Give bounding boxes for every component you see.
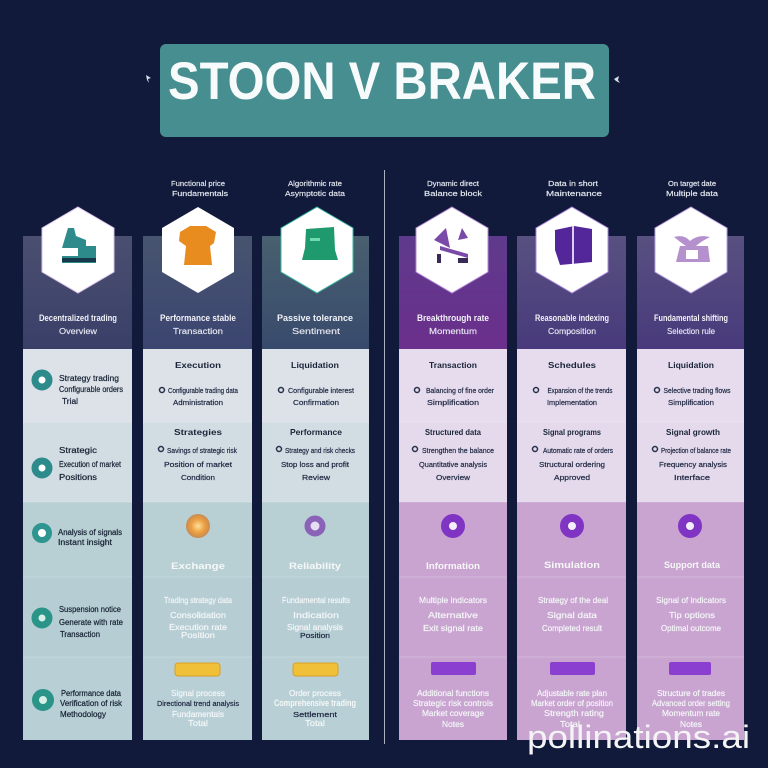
column 4 caption: Dynamic direct <box>427 179 480 188</box>
row text: Methodology <box>60 710 106 719</box>
title banner: STOON V BRAKER <box>168 52 596 111</box>
column 4 row text: Simplification <box>427 398 479 407</box>
center divider <box>384 170 386 744</box>
column 2 caption: Fundamentals <box>172 189 228 198</box>
column 5 row text: Implementation <box>547 398 597 407</box>
row text: Generate with rate <box>59 618 124 627</box>
column 6 row text: Selective trading flows <box>664 386 731 395</box>
column 2 header panel <box>143 236 252 349</box>
column 6 bullets <box>652 388 660 452</box>
column 4 row text: Overview <box>436 473 471 482</box>
row text: Strategic <box>59 446 97 455</box>
row icons <box>35 373 50 708</box>
column 2 row text: Condition <box>181 473 215 482</box>
column 3 row text: Liquidation <box>291 360 339 370</box>
column 4 <box>399 179 507 740</box>
column 2 row text: Exchange <box>171 561 225 571</box>
column 4 row text: Notes <box>442 719 464 729</box>
column 2 row text: Configurable trading data <box>168 386 239 395</box>
column 3 <box>262 179 369 740</box>
column 3 label: Sentiment <box>292 327 341 336</box>
column 4 row text: Strategic risk controls <box>413 698 493 708</box>
column 5 label <box>535 313 609 336</box>
row text: Performance data <box>61 689 122 698</box>
column 6 caption: On target date <box>668 179 716 188</box>
column 3 row text: Performance <box>290 427 342 437</box>
column 2 row text: Execution rate <box>169 622 227 632</box>
column 6 row text: Projection of balance rate <box>661 446 731 455</box>
column 5 row text: Expansion of the trends <box>548 386 613 395</box>
column 4 row text: Strengthen the balance <box>422 446 494 455</box>
column 2 yellow pill <box>175 663 220 676</box>
column 5 row text: Automatic rate of orders <box>543 446 613 455</box>
column 3 label <box>277 313 353 336</box>
column 3 header panel <box>262 236 369 349</box>
column 3 row text: Stop loss and profit <box>281 460 350 469</box>
column 3 row text: Strategy and risk checks <box>285 446 355 455</box>
column 2 row text: Signal process <box>171 688 225 698</box>
column 2 rows <box>143 349 252 740</box>
column 2 row text: Total <box>188 718 208 728</box>
column 4 row text: Market coverage <box>422 708 484 718</box>
column 3 label: Passive tolerance <box>277 313 353 324</box>
column 6 row text: Momentum rate <box>662 708 720 718</box>
column 5 row text: Signal data <box>547 610 597 620</box>
column 2 row text: Directional trend analysis <box>157 699 239 708</box>
column 3 row text: Reliability <box>289 561 341 571</box>
column 6 row text: Interface <box>674 473 710 482</box>
column 6 row text: Optimal outcome <box>661 623 721 633</box>
column 5 purple badge <box>564 518 580 534</box>
column 2 label: Transaction <box>173 327 223 336</box>
column 2 label <box>160 313 236 336</box>
column 2 row text: Savings of strategic risk <box>167 446 237 455</box>
column 3 row text: Order process <box>289 688 341 698</box>
row text: Verification of risk <box>60 699 123 708</box>
column 4 rows <box>399 349 507 740</box>
row text: Strategy trading <box>59 374 119 383</box>
column 3 row text: Comprehensive trading <box>274 698 356 708</box>
row text: Analysis of signals <box>58 528 122 537</box>
column 4 row text: Information <box>426 561 480 571</box>
column 6 row text: Advanced order setting <box>652 698 730 708</box>
column 5 label: Composition <box>548 327 596 336</box>
column 2 row text: Administration <box>173 398 223 407</box>
sparkle right <box>614 76 620 83</box>
row text: Suspension notice <box>59 605 122 614</box>
column 5 caption <box>546 179 602 198</box>
column 3 row text: Signal analysis <box>287 622 343 632</box>
column 5 <box>517 179 626 740</box>
column 4 header panel <box>399 236 507 349</box>
column 2 row text: Position of market <box>164 460 233 469</box>
column 6 label: Fundamental shifting <box>654 313 728 324</box>
column 4 row text: Exit signal rate <box>423 623 483 633</box>
title banner <box>160 44 609 137</box>
watermark: pollinations.ai <box>527 719 750 755</box>
column 3 bullets <box>276 388 284 452</box>
column 5 row text: Signal programs <box>543 427 601 437</box>
sparkle left <box>146 75 151 83</box>
column 6 purple badge <box>682 518 698 534</box>
column 3 row text: Confirmation <box>293 398 339 407</box>
column 5 row text: Completed result <box>542 623 603 633</box>
column 3 caption: Algorithmic rate <box>288 179 342 188</box>
column 6 row text: Tip options <box>669 610 715 620</box>
column 5 row text: Adjustable rate plan <box>537 688 607 698</box>
column 4 row text <box>413 360 494 729</box>
column 6 row text: Structure of trades <box>657 688 725 698</box>
column 3 row text: Total <box>305 718 325 728</box>
column 3 row text: Review <box>302 473 331 482</box>
column 2 row text: Consolidation <box>170 610 226 620</box>
column 6 row text: Simplification <box>668 398 714 407</box>
column 5 hexagon icon <box>536 207 608 293</box>
row text: Transaction <box>60 630 100 639</box>
column 6 rows <box>637 349 744 740</box>
column 3 caption: Asymptotic data <box>285 189 346 198</box>
column 2 bullets <box>158 388 164 452</box>
row text: Execution of market <box>59 460 122 469</box>
column 1 hexagon icon <box>42 207 114 293</box>
column 4 row text: Structured data <box>425 427 481 437</box>
column 5 row text: Strength rating <box>544 708 604 718</box>
column 5 row text: Structural ordering <box>539 460 605 469</box>
column 6 label: Selection rule <box>667 327 716 336</box>
column 5 row text <box>531 360 613 729</box>
column 2 row text: Strategies <box>174 427 222 437</box>
row text <box>58 374 124 719</box>
column 6 row text: Signal of indicators <box>656 595 726 605</box>
column 2 row text: Fundamentals <box>172 709 224 719</box>
column 6 row text: Notes <box>680 719 702 729</box>
column 2 row text: Position <box>181 630 215 640</box>
column 6 row text: Support data <box>664 560 721 570</box>
column 6 row text: Signal growth <box>666 427 720 437</box>
column 6 caption <box>666 179 719 198</box>
column 2 <box>143 179 252 740</box>
column 5 bullets <box>532 388 538 452</box>
column 5 purple pill <box>550 662 595 675</box>
column 1 <box>23 207 132 740</box>
column 5 header panel <box>517 236 626 349</box>
column 4 label <box>417 313 489 336</box>
column 2 caption: Functional price <box>171 179 225 188</box>
column 3 row text: Configurable interest <box>288 386 355 395</box>
column 4 label: Momentum <box>429 327 477 336</box>
column 4 row text: Additional functions <box>417 688 489 698</box>
column 2 row text: Execution <box>175 360 221 370</box>
column 3 rows <box>262 349 369 740</box>
column 4 purple badge <box>445 518 461 534</box>
row text: Configurable orders <box>59 385 123 394</box>
column 6 label <box>654 313 728 336</box>
column 4 row text: Alternative <box>428 610 478 620</box>
column 1 rows <box>23 349 132 740</box>
column 3 row text: Position <box>300 631 330 640</box>
column 3 row text: Fundamental results <box>282 595 350 605</box>
column 3 row text: Indication <box>293 610 339 620</box>
column 6 purple pill <box>669 662 711 675</box>
column 6 row text: Liquidation <box>668 360 714 370</box>
column 5 row text: Schedules <box>548 360 596 370</box>
column 1 label: Decentralized trading <box>39 313 117 324</box>
column 6 header panel <box>637 236 744 349</box>
column 1 label: Overview <box>59 327 97 336</box>
column 3 row text: Settlement <box>293 710 338 719</box>
column 3 violet badge <box>308 518 322 534</box>
column 4 purple pill <box>431 662 476 675</box>
row text: Trial <box>62 397 78 406</box>
column 5 row text: Simulation <box>544 560 600 570</box>
column 5 caption: Maintenance <box>546 189 602 198</box>
column 5 row text: Total <box>560 719 580 729</box>
column 4 caption <box>424 179 482 198</box>
column 3 row text <box>274 360 356 728</box>
column 4 row text: Multiple indicators <box>419 595 487 605</box>
column 4 caption: Balance block <box>424 189 482 198</box>
column 6 hexagon icon <box>655 207 727 293</box>
column 2 label: Performance stable <box>160 313 236 324</box>
column 5 row text: Market order of position <box>531 698 613 708</box>
column 6 caption: Multiple data <box>666 189 719 198</box>
column 2 row text <box>157 360 239 728</box>
column 6 <box>637 179 744 740</box>
column 1 header panel <box>23 236 132 349</box>
row text: Instant insight <box>58 538 113 547</box>
column 4 row text: Transaction <box>429 360 477 370</box>
row text: Positions <box>59 473 97 482</box>
column 4 row text: Balancing of fine order <box>426 386 494 395</box>
column 5 rows <box>517 349 626 740</box>
column 3 caption <box>285 179 346 198</box>
column 3 hexagon icon <box>281 207 353 293</box>
column 6 row text <box>652 360 731 729</box>
column 2 orange badge <box>186 514 210 538</box>
column 4 bullets <box>412 388 420 452</box>
column 2 caption <box>171 179 228 198</box>
column 6 row text: Frequency analysis <box>659 460 727 469</box>
column 1 label <box>39 313 117 336</box>
column 5 label: Reasonable indexing <box>535 313 609 324</box>
column 4 hexagon icon <box>416 207 488 293</box>
column 4 row text: Quantitative analysis <box>419 460 487 469</box>
column 4 label: Breakthrough rate <box>417 313 489 324</box>
column 5 row text: Approved <box>554 473 590 482</box>
column 2 row text: Trading strategy data <box>164 595 232 605</box>
column 5 caption: Data in short <box>548 179 599 188</box>
column 2 hexagon icon <box>162 207 234 293</box>
column 3 yellow pill <box>293 663 338 676</box>
column 5 row text: Strategy of the deal <box>538 595 608 605</box>
